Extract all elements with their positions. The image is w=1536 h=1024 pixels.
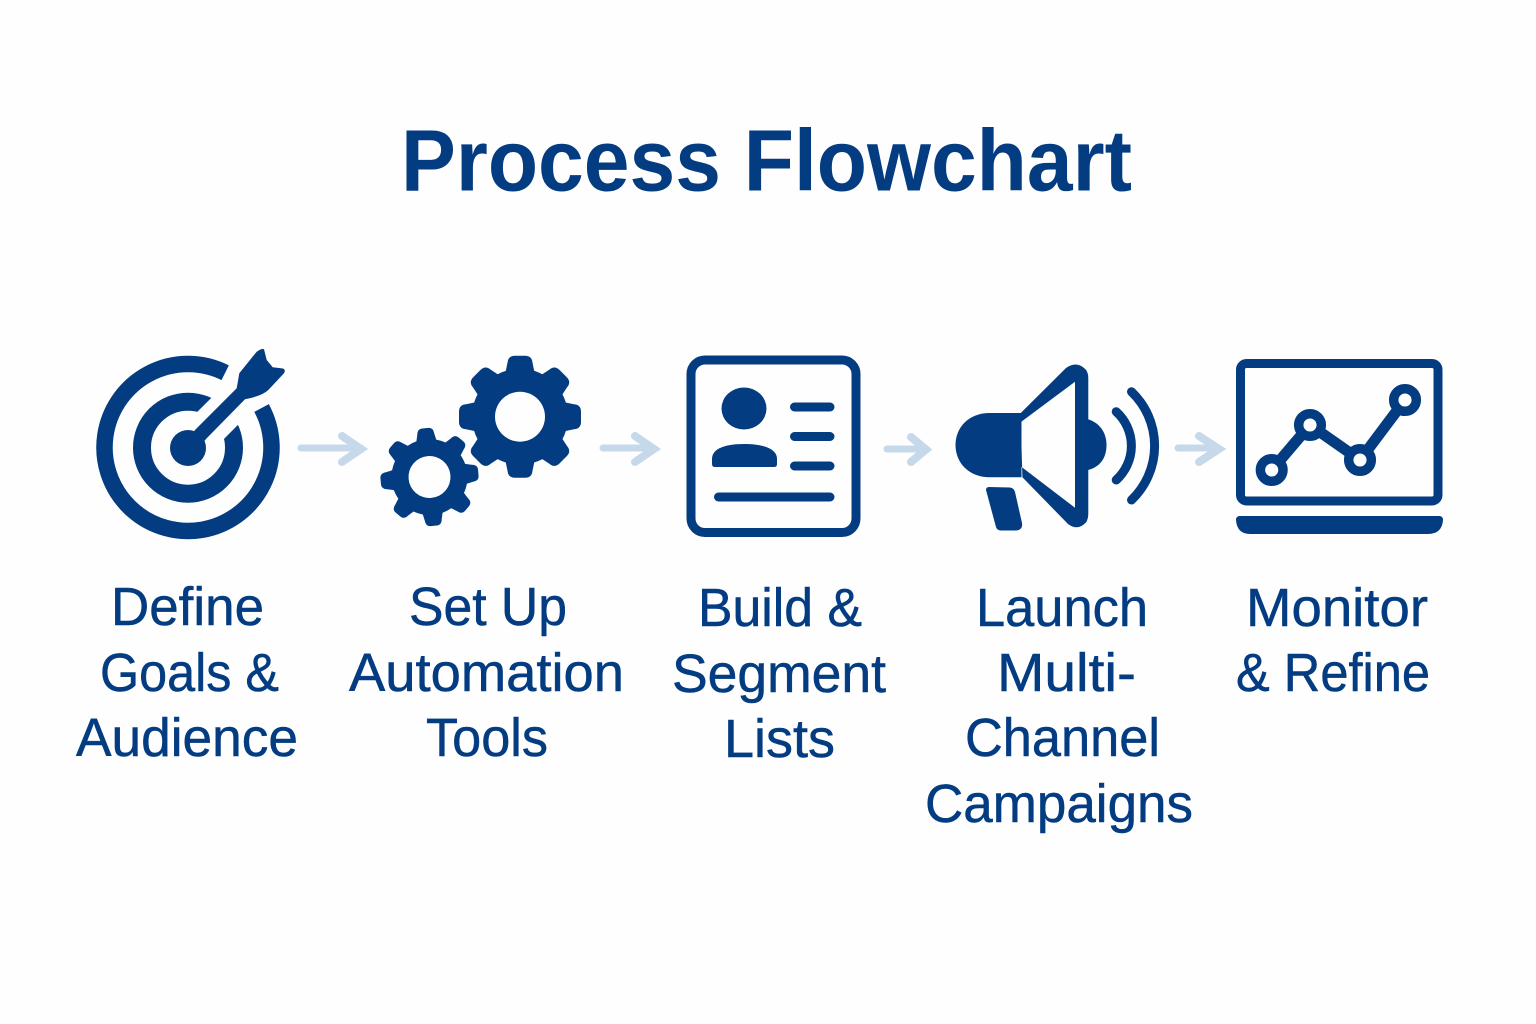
label: step 3: Build &	[698, 578, 862, 638]
label: step 1: Goals &	[100, 643, 279, 703]
label: step 1: Define	[111, 577, 264, 637]
mouthpiece	[956, 413, 1022, 477]
arrow into bullseye	[188, 349, 285, 452]
icon: target with arrow	[104, 349, 285, 531]
label: step 5	[1236, 578, 1430, 703]
handle	[986, 487, 1022, 530]
arrow 3	[887, 437, 926, 462]
label: step 4: Multi-	[997, 643, 1136, 703]
outer ring	[104, 364, 271, 531]
icon: laptop with line chart	[1236, 364, 1443, 534]
label: step 4: Channel	[965, 708, 1160, 768]
front bump	[1088, 419, 1106, 470]
label: step 1	[76, 577, 298, 768]
label: step 3: Segment	[672, 644, 886, 704]
label: step 2	[349, 577, 624, 768]
sound waves	[1116, 392, 1155, 500]
arrow 2	[603, 436, 654, 462]
label: step 3: Lists	[724, 709, 835, 769]
icon: megaphone	[956, 364, 1155, 530]
icon: gears	[376, 356, 581, 530]
chart line	[1272, 400, 1405, 470]
large gear	[459, 356, 581, 478]
label: step 3	[672, 578, 886, 769]
label: step 1: Audience	[76, 708, 298, 768]
title: Process Flowchart	[401, 112, 1132, 210]
label: step 4: Campaigns	[925, 774, 1193, 834]
text lines	[718, 407, 830, 497]
gap in middle ring	[211, 404, 232, 425]
arrow 1	[301, 436, 361, 462]
horn	[1020, 364, 1088, 527]
middle ring	[142, 402, 234, 494]
chart points	[1260, 389, 1416, 481]
arrow 4	[1178, 436, 1219, 462]
person head	[722, 388, 766, 430]
label: step 4	[925, 578, 1193, 834]
label: step 5: & Refine	[1236, 643, 1430, 703]
label: step 5: Monitor	[1246, 578, 1428, 638]
label: step 2: Set Up	[409, 577, 567, 637]
label: step 2: Automation	[349, 643, 624, 703]
label: step 2: Tools	[426, 708, 548, 768]
small gear	[376, 424, 483, 530]
laptop base	[1236, 516, 1443, 534]
card frame	[691, 360, 856, 532]
person shoulders	[712, 444, 777, 467]
screen frame	[1240, 364, 1438, 501]
label: step 4: Launch	[976, 578, 1148, 638]
bullseye	[170, 430, 206, 466]
icon: contact card	[691, 360, 856, 532]
